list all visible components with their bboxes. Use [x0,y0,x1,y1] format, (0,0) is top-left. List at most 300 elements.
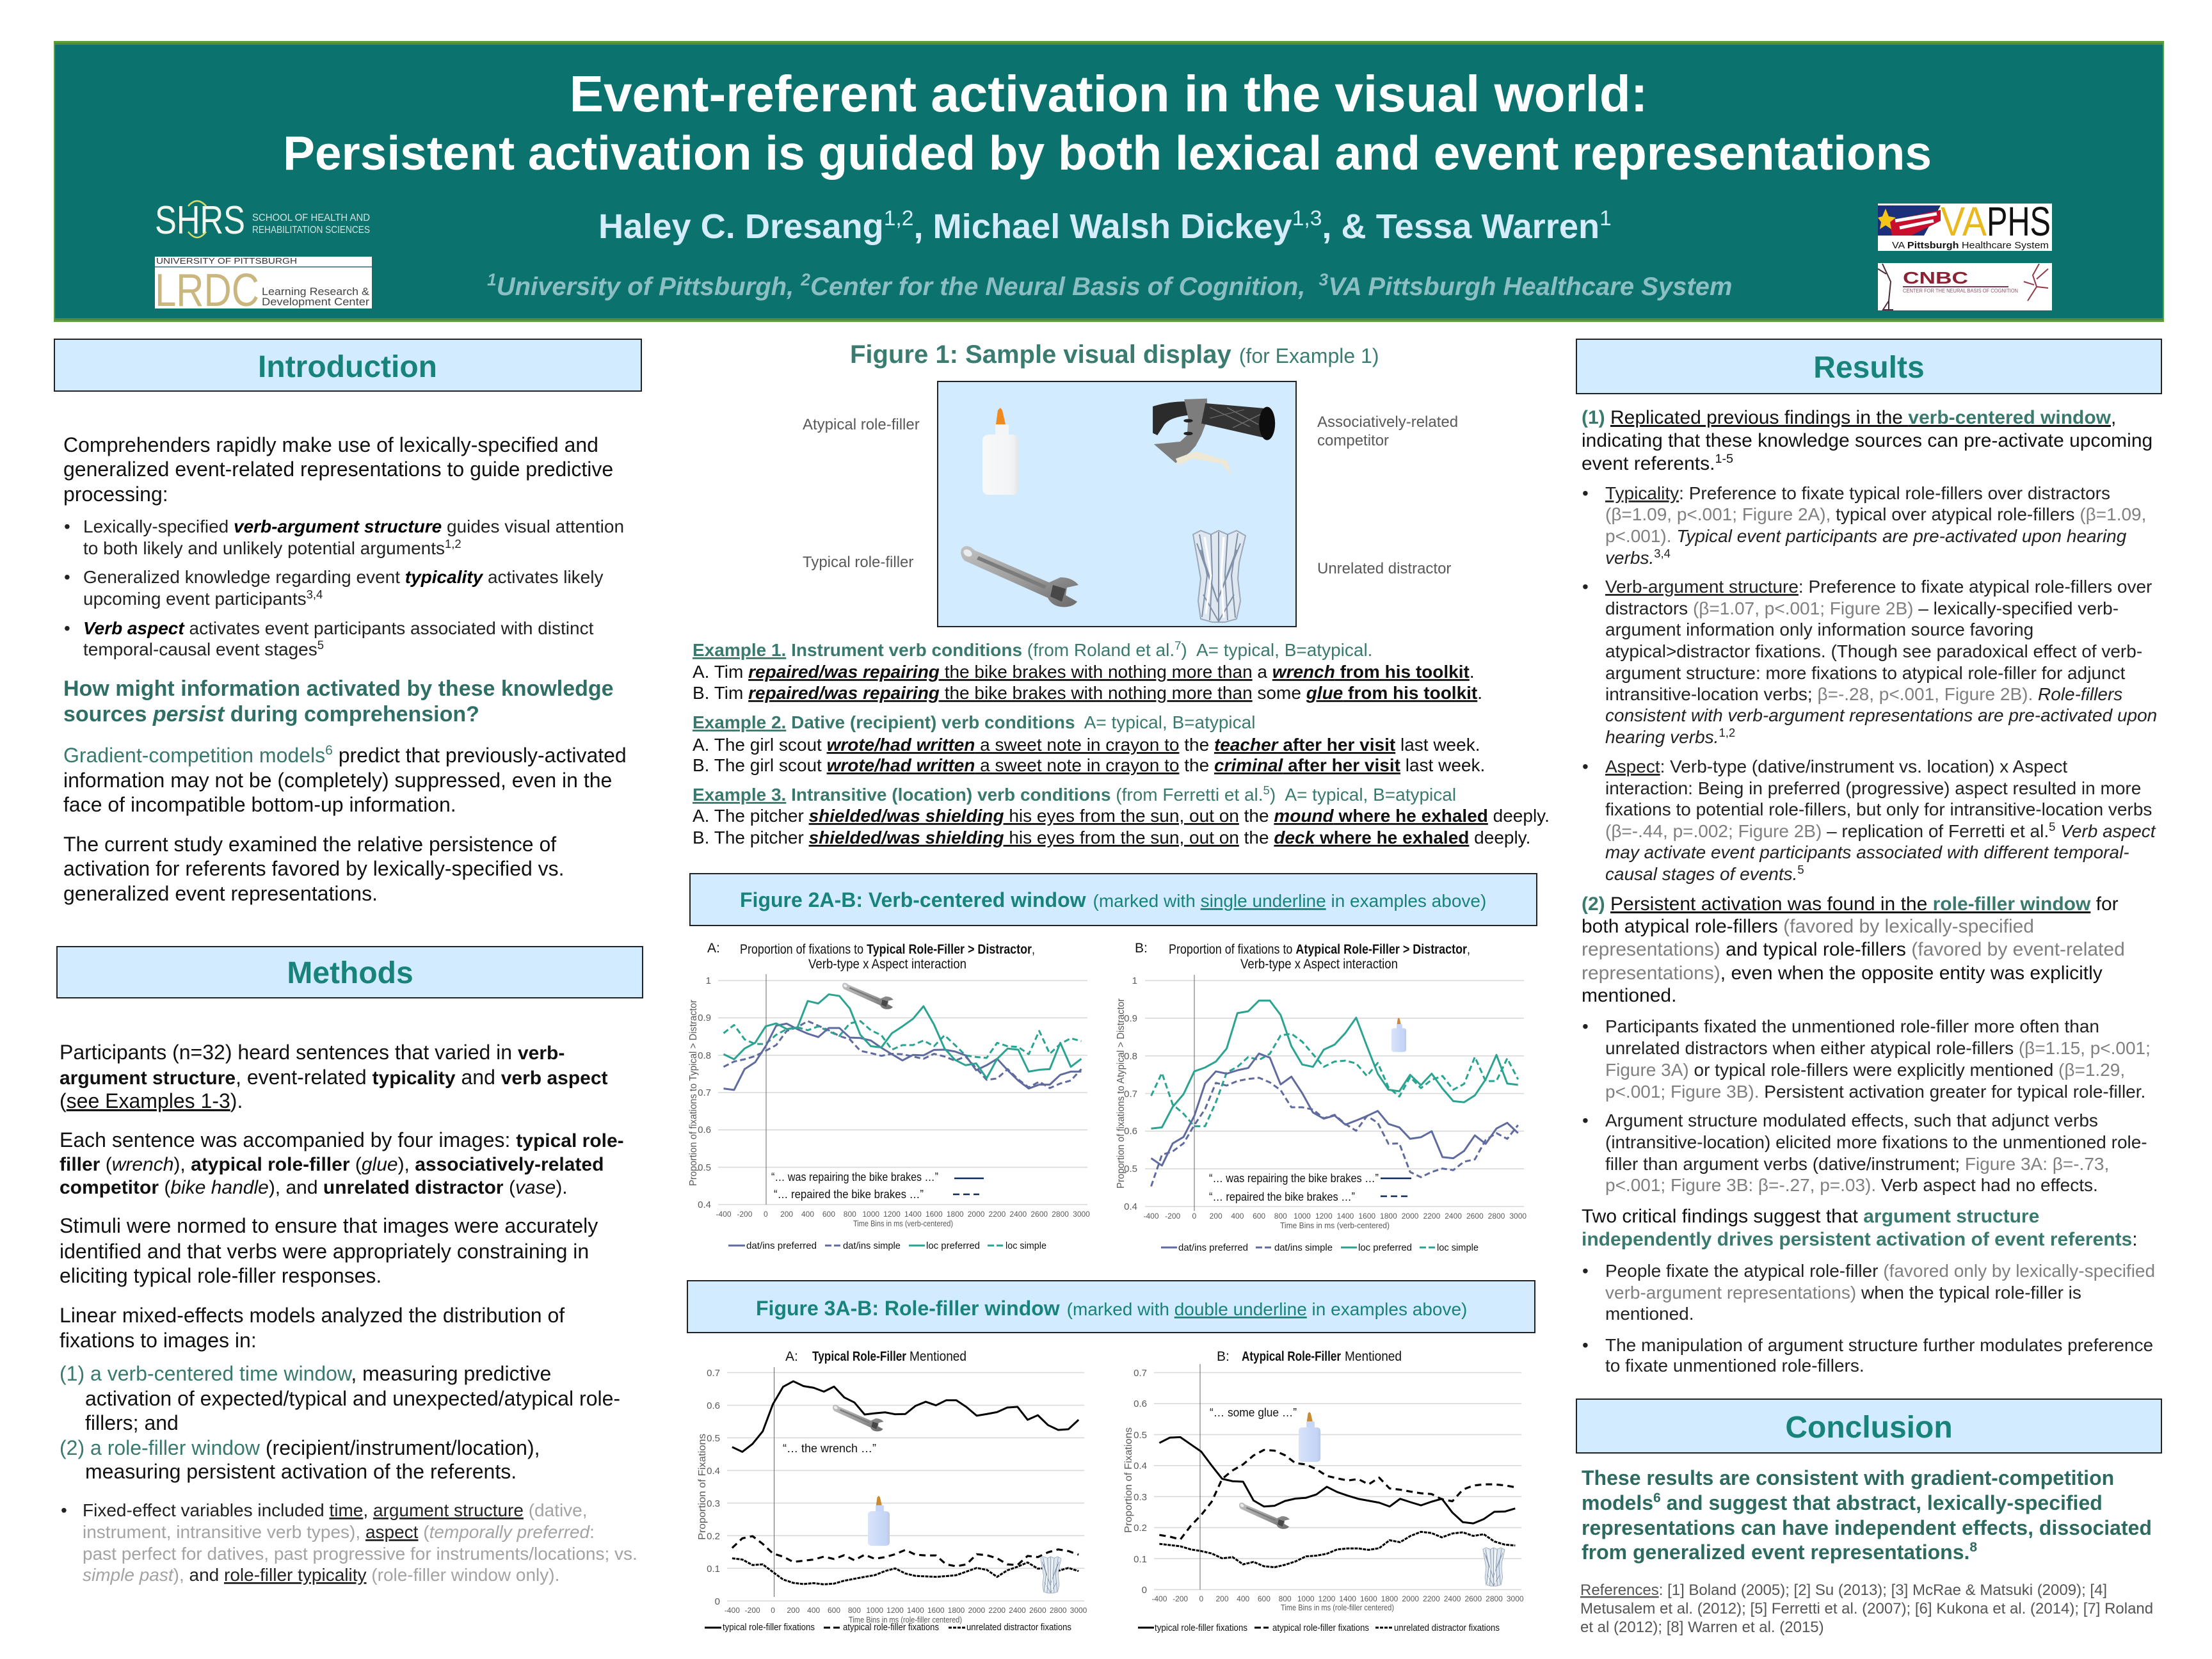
bullet: verb-argument structure [1582,577,2157,747]
x axis 3A: 1800 [948,1606,965,1615]
text block: images: Each sentence was accompanied by four images: typical role- [60,1128,624,1151]
x axis 2A: 2800 [1052,1210,1069,1219]
y axis 2A: 0.7 [698,1087,711,1098]
bullets: persistent activation: (intransitive-location) elicited more fixations to the unmentioned role- [1605,1132,2147,1152]
conclusion text: representations can have independent effects, dissociated [1582,1516,2152,1539]
example 1: B. Tim repaired/was repairing the bike brakes with nothing more than some glue from his toolkit. [693,683,1482,703]
bullet: aspect: • [1582,757,1589,776]
x axis 2B: 400 [1231,1212,1244,1221]
bullet list: knowledge sources: • [64,618,70,638]
x axis 2B: 1800 [1380,1212,1397,1221]
x axis 2A: 3000 [1073,1210,1090,1219]
bullet list: knowledge sources: temporal-causal event stages5 [83,638,324,659]
example 3: B. The pitcher shielded/was shielding his eyes from the sun, out on the deck where he exhaled deeply. [693,828,1530,847]
x axis 3A [725,1606,1087,1624]
legend 3B [1138,1623,1500,1633]
logo: VAPHS: VA [1941,198,1987,244]
legend 3A: atypical role-filler fixations [843,1622,939,1633]
x axis 2B: 3000 [1509,1212,1527,1221]
x axis 3B: 1200 [1318,1594,1336,1603]
research question: sources persist during comprehension? [63,702,479,726]
heading: Introduction [54,339,641,391]
bullet list: knowledge sources [64,517,624,659]
bullet: verb-argument structure: hearing verbs.1,2 [1605,726,1735,747]
panel: Figure 2A-B heading: Figure 2A-B: Verb-centered window (marked with single underline in examples above) [740,888,1486,911]
x axis 3A: -400 [725,1606,740,1615]
legend 2A: dat/ins simple [843,1240,901,1251]
chart title 2A: Verb-type x Aspect interaction [808,957,966,972]
text block: current study: activation for referents favored by lexically-specified vs. [63,857,565,880]
x axis 2A: 1200 [883,1210,901,1219]
chart title 2A [707,941,1035,972]
callout 3B: “… some glue …” [1210,1406,1297,1419]
x axis 3A: 800 [848,1606,861,1615]
y axis 3B: 0.6 [1134,1399,1147,1409]
bullet: verb-argument structure: argument structure: more fixations to atypical role-filler for adjunct [1605,663,2126,683]
label: associatively-related competitor [1317,413,1458,449]
aspect key 2B [1209,1172,1411,1203]
finding 2: both atypical role-fillers (favored by lexically-specified [1582,916,2034,937]
authors: Haley C. Dresang1,2, Michael Walsh Dickey1,3, & Tessa Warren1 [598,207,1612,246]
x axis 3A: 0 [771,1606,775,1615]
bullet list: knowledge sources: Lexically-specified verb-argument structure guides visual attention [83,517,624,536]
x axis 3A: -200 [745,1606,760,1615]
y axis 2B: 0.7 [1124,1089,1137,1100]
y axis 3A: 0.3 [707,1498,720,1509]
legend 2B: dat/ins preferred [1178,1242,1248,1253]
y axis 3A: 0.6 [707,1400,720,1411]
x axis 3B: 2200 [1423,1594,1440,1603]
legend 2A: dat/ins preferred [746,1240,817,1251]
bullet: typicality: Typicality: Preference to fixate typical role-fillers over distractors [1605,483,2110,503]
icon: small vase 3B [1483,1548,1505,1586]
label: associatively-related competitor: Associatively-related [1317,413,1458,431]
logo: LRDC: LRDC [155,265,259,316]
bullet: fixed-effect variables: Fixed-effect variables included time, argument structure (dative, [83,1500,588,1520]
legend 2A: loc simple [1006,1240,1046,1251]
x axis 3A: Time Bins in ms (role-filler centered) [849,1615,962,1624]
y axis 2A: Proportion of fixations to Typical > Distractor [688,999,699,1186]
bullets: persistent activation: • [1582,1016,1589,1036]
y axis 2B: 0.8 [1124,1051,1137,1062]
legend 2B: loc preferred [1358,1242,1412,1253]
bullet: fixed-effect variables: simple past), and role-filler typicality (role-filler window only). [83,1565,559,1585]
chart title 3A [785,1349,966,1364]
y axis 3B: 0 [1142,1585,1147,1596]
x axis 3B: 600 [1258,1594,1270,1603]
bullet: aspect: may activate event participants associated with different temporal- [1605,842,2129,862]
logo: CNBC: CENTER FOR THE NEURAL BASIS OF COGNITION [1903,288,2018,294]
label: typical role-filler: Typical role-filler [803,554,913,571]
text block: models: (2) a role-filler window (recipient/instrument/location), [60,1436,540,1459]
x axis 3B: 2400 [1444,1594,1461,1603]
logo: LRDC: UNIVERSITY OF PITTSBURGH [156,256,297,266]
x axis 3B: 2800 [1486,1594,1503,1603]
heading: Results [1576,339,2161,394]
x axis 2B: 1000 [1294,1212,1311,1221]
bullet: fixed-effect variables: • [61,1500,67,1520]
data lines 3B [1159,1437,1515,1567]
x axis 2A: 200 [780,1210,793,1219]
x axis 2B [1143,1212,1527,1230]
chart: Figure 2A [688,941,1090,1251]
x axis 2A: 600 [822,1210,835,1219]
x axis 3B: -200 [1173,1594,1188,1603]
icon: bike handle [1153,399,1275,476]
text block: gradient-competition: face of incompatible bottom-up information. [63,793,456,816]
label: associatively-related competitor: competitor [1317,432,1389,449]
title: Event-referent activation in the visual world: [570,65,1647,122]
text block: norming: identified and that verbs were appropriately constraining in [60,1240,589,1263]
bullet: verb-argument structure: • [1582,577,1589,597]
finding 1: (1) Replicated previous findings in the verb-centered window, [1582,407,2116,428]
icon: glue bottle [982,408,1018,495]
chart title 2A: Proportion of fixations to Typical Role-Filler > Distractor, [740,942,1035,957]
bullets: persistent activation: Argument structure modulated effects, such that adjunct verbs [1605,1110,2098,1130]
bullets: critical findings: • [1582,1335,1589,1355]
bullet: fixed-effect variables: past perfect for datives, past progressive for instruments/locations; vs. [83,1544,637,1564]
legend 2B: dat/ins simple [1274,1242,1333,1253]
text block: images: competitor (bike handle), and unrelated distractor (vase). [60,1177,568,1198]
x axis 2A: 2200 [989,1210,1006,1219]
x axis 3A: 600 [828,1606,840,1615]
bullets: persistent activation: p<.001; Figure 3B). Persistent activation greater for typical role-filler. [1605,1082,2145,1102]
chart title 3B: B: [1217,1349,1230,1364]
chart title 2B [1135,941,1470,972]
conclusion text: from generalized event representations.8 [1582,1540,1977,1564]
bullet: fixed-effect variables: instrument, intransitive verb types), aspect (temporally preferred: [83,1522,595,1542]
chart title 2B: Verb-type x Aspect interaction [1240,957,1398,972]
y axis 2B: 1 [1132,975,1137,986]
legend 3B: unrelated distractor fixations [1394,1623,1500,1633]
finding 2: mentioned. [1582,985,1676,1006]
logo: SHRS: REHABILITATION SCIENCES [252,225,370,236]
chart title 3A: Mentioned [910,1349,966,1364]
text block: images: filler (wrench), atypical role-filler (glue), associatively-related [60,1154,604,1175]
bullets: persistent activation: Figure 3A) or typical role-fillers were explicitly mentioned (β=1.29, [1605,1060,2125,1080]
text block: norming [60,1214,598,1287]
x axis 2B: 2000 [1402,1212,1419,1221]
heading: Results: Results [1813,351,1925,385]
callout 3A: “… the wrench …” [783,1442,876,1455]
x axis 2B: 2200 [1423,1212,1441,1221]
conclusion text: models6 and suggest that abstract, lexically-specified [1582,1491,2103,1514]
bullet: verb-argument structure: atypical>distractor fixations. (Though see paradoxical effect of verb- [1605,641,2142,661]
text block: models: measuring persistent activation of the referents. [85,1460,517,1483]
y axis 3B: Proportion of Fixations [1123,1427,1134,1533]
text block: participants [60,1041,608,1112]
bullets: critical findings [1582,1261,2155,1375]
icon: small glue 2B [1391,1018,1406,1052]
x axis 2B: 800 [1274,1212,1287,1221]
x axis 3B: 2000 [1402,1594,1419,1603]
references: Metusalem et al. (2012); [5] Ferretti et al. (2007); [6] Kukona et al. (2014); [7] Roland [1580,1600,2153,1617]
data lines 2A [723,995,1081,1090]
bullet: typicality: p<.001). Typical event participants are pre-activated upon hearing [1605,526,2127,546]
x axis 2B: 1200 [1315,1212,1333,1221]
x axis 2A: 1400 [904,1210,922,1219]
text block: models: activation of expected/typical and unexpected/atypical role- [85,1387,620,1410]
x axis 3B: 400 [1237,1594,1250,1603]
x axis 2A: 2000 [968,1210,985,1219]
bullet: verb-argument structure: distractors (β=1.07, p<.001; Figure 2B) – lexically-specified verb- [1605,598,2119,618]
y axis 2A: 0.4 [698,1199,711,1210]
data lines 2B [1151,1000,1518,1187]
text block: norming: Stimuli were normed to ensure that images were accurately [60,1214,598,1237]
chart: Figure 3A [697,1349,1087,1633]
text block: current study: generalized event representations. [63,882,378,905]
y axis 2A [688,975,711,1210]
examples [693,639,1550,847]
y axis 2A: 0.6 [698,1125,711,1135]
x axis 3B: Time Bins in ms (role-filler centered) [1281,1603,1394,1612]
bullet: aspect [1582,757,2156,884]
logo: VAPHS [1878,198,2052,251]
bullet: verb-argument structure: Verb-argument structure: Preference to fixate atypical role-fillers over [1605,577,2152,597]
chart title 2B: B: [1135,941,1148,956]
legend 2B: loc simple [1437,1242,1479,1253]
bullet list: knowledge sources: • [64,567,70,587]
y axis 3B [1123,1368,1147,1596]
bullet: aspect: (β=-.44, p=.002; Figure 2B) – replication of Ferretti et al.5 Verb aspect [1605,820,2156,841]
x axis 3A: 1000 [866,1606,883,1615]
x axis 3A: 2200 [988,1606,1006,1615]
x axis 2A: 2400 [1009,1210,1027,1219]
example 1 [693,639,1482,703]
y axis 3A: 0.1 [707,1564,720,1575]
finding 2: representations), even when the opposite entity was explicitly [1582,963,2103,984]
x axis 3B: 2600 [1464,1594,1482,1603]
icon: wrench [961,546,1078,607]
text block: current study [63,833,565,905]
x axis 3A: 2600 [1029,1606,1046,1615]
icon: small wrench 2A [842,982,894,1009]
y axis 3B: 0.2 [1134,1523,1147,1534]
legend 2A: loc preferred [926,1240,980,1251]
example 3: A. The pitcher shielded/was shielding his eyes from the sun, out on the mound where he exhaled deeply. [693,806,1550,826]
y axis 2B: 0.4 [1124,1201,1137,1212]
example 1: A. Tim repaired/was repairing the bike brakes with nothing more than a wrench from his toolkit. [693,662,1475,682]
bullets: critical findings: People fixate the atypical role-filler (favored only by lexically-specified [1605,1261,2155,1281]
finding 1 [1582,407,2152,474]
banner [54,41,2164,322]
bullets: critical findings: The manipulation of argument structure further modulates preference [1605,1335,2153,1355]
logo: LRDC: Learning Research & [262,285,370,298]
text block: gradient-competition [63,743,627,816]
legend 3A: unrelated distractor fixations [966,1622,1071,1633]
text block: gradient-competition: Gradient-competition models6 predict that previously-activated [63,743,627,767]
x axis 2B: 200 [1210,1212,1222,1221]
x axis 2A: 400 [801,1210,814,1219]
icon: small vase 3A [1041,1557,1061,1593]
label: atypical role-filler: Atypical role-filler [803,416,920,433]
bullets: persistent activation: Participants fixated the unmentioned role-filler more often than [1605,1016,2099,1036]
y axis 2A: 0.5 [698,1162,711,1173]
research question [63,677,614,726]
y axis 2A: 0.8 [698,1050,711,1061]
text block: gradient-competition: information may not be (completely) suppressed, even in the [63,769,612,792]
legend 3B: typical role-filler fixations [1155,1623,1247,1633]
bullets: critical findings: • [1582,1261,1589,1281]
y axis 3A: Proportion of Fixations [697,1434,708,1540]
affiliations: 1University of Pittsburgh, 2Center for the Neural Basis of Cognition, 3VA Pittsburgh Healthcare System [487,270,1732,301]
icon: small wrench 3B [1239,1502,1290,1529]
logo: CNBC: CNBC [1903,268,1968,287]
icon: small glue 3B [1299,1412,1320,1462]
x axis 2A: -400 [716,1210,732,1219]
example 2 [693,712,1485,775]
x axis 2B: 600 [1253,1212,1265,1221]
chart title 3B: Atypical Role-Filler [1242,1349,1341,1364]
panel: Results [1576,339,2161,1375]
x axis 2A: 800 [844,1210,856,1219]
y axis 3B: 0.7 [1134,1368,1147,1379]
bullet list: knowledge sources: to both likely and unlikely potential arguments1,2 [83,537,461,558]
conclusion text: These results are consistent with gradient-competition [1582,1466,2114,1489]
x axis 2B: 2600 [1466,1212,1484,1221]
text block: intro paragraph: processing: [63,483,168,506]
y axis 3B: 0.5 [1134,1430,1147,1441]
bullet list: knowledge sources: • [64,517,70,536]
title [283,65,1932,180]
finding 2 [1582,894,2125,1006]
bullet list: knowledge sources: Generalized knowledge regarding event typicality activates likely [83,567,603,587]
y axis 2B: 0.9 [1124,1013,1137,1024]
bullet list: knowledge sources: upcoming event participants3,4 [83,588,323,609]
x axis 2B: 1400 [1337,1212,1354,1221]
text block: models [60,1304,620,1483]
title: Persistent activation is guided by both lexical and event representations [283,126,1932,180]
bullet: verb-argument structure: argument information only information source favoring [1605,620,2033,639]
x axis 3B: -400 [1151,1594,1167,1603]
legend 2B [1161,1242,1479,1253]
x axis 3B: 0 [1199,1594,1203,1603]
chart title 3A: Typical Role-Filler [812,1349,906,1364]
bullet list: knowledge sources: Verb aspect activates event participants associated with distinct [83,618,594,638]
figure 1 heading: Figure 1: Sample visual display (for Example 1) [850,341,1379,369]
bullets: persistent activation: p<.001; Figure 3B: β=-.27, p=.03). Verb aspect had no effects. [1605,1175,2098,1195]
x axis 2B: -200 [1165,1212,1181,1221]
text block: intro paragraph: Comprehenders rapidly make use of lexically-specified and [63,433,598,456]
x axis 2B: 2400 [1445,1212,1462,1221]
logo: VAPHS: VA Pittsburgh Healthcare System [1892,240,2049,251]
heading: Introduction: Introduction [258,350,437,384]
text block: intro paragraph [63,433,613,506]
x axis 2A: 0 [764,1210,768,1219]
label: unrelated distractor: Unrelated distractor [1317,560,1451,577]
y axis 3A: 0.2 [707,1531,720,1542]
bullet: typicality: • [1582,483,1589,503]
x axis 3A: 400 [807,1606,821,1615]
logo: CNBC [1878,263,2052,310]
text block: models: fillers; and [85,1411,179,1434]
text block: models: Linear mixed-effects models analyzed the distribution of [60,1304,565,1327]
text block: models: (1) a verb-centered time window, measuring predictive [60,1362,551,1385]
x axis 3B: 1400 [1339,1594,1356,1603]
x axis 2B: Time Bins in ms (verb-centered) [1280,1221,1390,1230]
x axis 3B: 800 [1279,1594,1292,1603]
x axis 3A: 3000 [1070,1606,1087,1615]
legend 3B: atypical role-filler fixations [1272,1623,1369,1633]
x axis 3B: 1800 [1381,1594,1399,1603]
x axis 2A: -200 [737,1210,753,1219]
x axis 3B: 1000 [1297,1594,1315,1603]
logo: LRDC: Development Center [262,296,369,308]
bullet: aspect: causal stages of events.5 [1605,863,1804,884]
y axis 2B [1116,975,1137,1212]
y axis 3B: 0.1 [1134,1554,1147,1565]
x axis 2A: 1600 [926,1210,943,1219]
critical findings: independently drives persistent activation of event referents: [1582,1229,2138,1250]
chart title 3B [1217,1349,1402,1364]
x axis 2B: 2800 [1488,1212,1505,1221]
text block: images [60,1128,624,1198]
aspect key 2A: “… was repairing the bike brakes …” [771,1171,938,1183]
text block: models: fixations to images in: [60,1329,257,1352]
chart: Figure 2B [1116,941,1527,1253]
y axis 3A [697,1368,720,1607]
x axis 3A: 2800 [1050,1606,1067,1615]
x axis 3B: 1600 [1360,1594,1377,1603]
icon: small wrench 3A [833,1404,884,1431]
text block: current study: The current study examined the relative persistence of [63,833,556,856]
panel: Conclusion [1576,1399,2161,1636]
logo: SHRS [155,198,370,243]
bullets: critical findings: verb-argument representations) when the typical role-filler is [1605,1283,2081,1302]
bullet: typicality [1582,483,2146,568]
example 2: Example 2. Dative (recipient) verb conditions A= typical, B=atypical [693,712,1255,732]
icon: small glue 3A [868,1496,890,1546]
logo: SHRS: SHRS [155,198,245,243]
y axis 3B: 0.3 [1134,1492,1147,1503]
y axis 2A: 1 [706,975,711,986]
critical findings: Two critical findings suggest that argument structure [1582,1206,2039,1227]
x axis 3B: 3000 [1507,1594,1524,1603]
chart: Figure 3B [1123,1349,1524,1633]
x axis 2A [716,1210,1090,1228]
bullet: aspect: Aspect: Verb-type (dative/instrument vs. location) x Aspect [1605,757,2067,776]
panel: Methods [57,947,643,1585]
chart title 3A: A: [785,1349,798,1364]
example 2: B. The girl scout wrote/had written a sweet note in crayon to the criminal after her visit last week. [693,755,1485,775]
x axis 3B: 200 [1215,1594,1229,1603]
finding 1: event referents.1-5 [1582,452,1733,474]
text block: intro paragraph: generalized event-related representations to guide predictive [63,458,613,481]
aspect key 2B: “… was repairing the bike brakes …” [1209,1172,1379,1185]
x axis 3A: 2400 [1009,1606,1026,1615]
bullets: critical findings: mentioned. [1605,1304,1694,1324]
x axis 3A: 1200 [886,1606,904,1615]
x axis 3A: 1400 [907,1606,924,1615]
example 1: Example 1. Instrument verb conditions (from Roland et al.7) A= typical, B=atypical. [693,639,1372,660]
references: References: [1] Boland (2005); [2] Su (2013); [3] McRae & Matsuki (2009); [4] [1580,1582,2107,1599]
bullet: verb-argument structure: consistent with verb-argument representations are pre-activated upon [1605,705,2157,725]
x axis 2A: 1800 [947,1210,964,1219]
text block: norming: eliciting typical role-filler responses. [60,1264,381,1287]
legend 3A [705,1622,1071,1633]
x axis 2A: Time Bins in ms (verb-centered) [853,1219,953,1228]
bullet: aspect: fixations to potential role-fillers, but only for intransitive-location verbs [1605,799,2152,819]
conclusion text [1582,1466,2152,1564]
y axis 3A: 0.5 [707,1433,720,1444]
heading: Methods [57,947,643,998]
panel: Introduction [54,339,641,905]
finding 2: representations) and typical role-fillers (favored by event-related [1582,939,2125,960]
x axis 3A: 2000 [968,1606,985,1615]
x axis 3A: 1600 [927,1606,945,1615]
text block: participants: argument structure, event-related typicality and verb aspect [60,1066,608,1089]
finding 2: (2) Persistent activation was found in the role-filler window for [1582,894,2119,915]
